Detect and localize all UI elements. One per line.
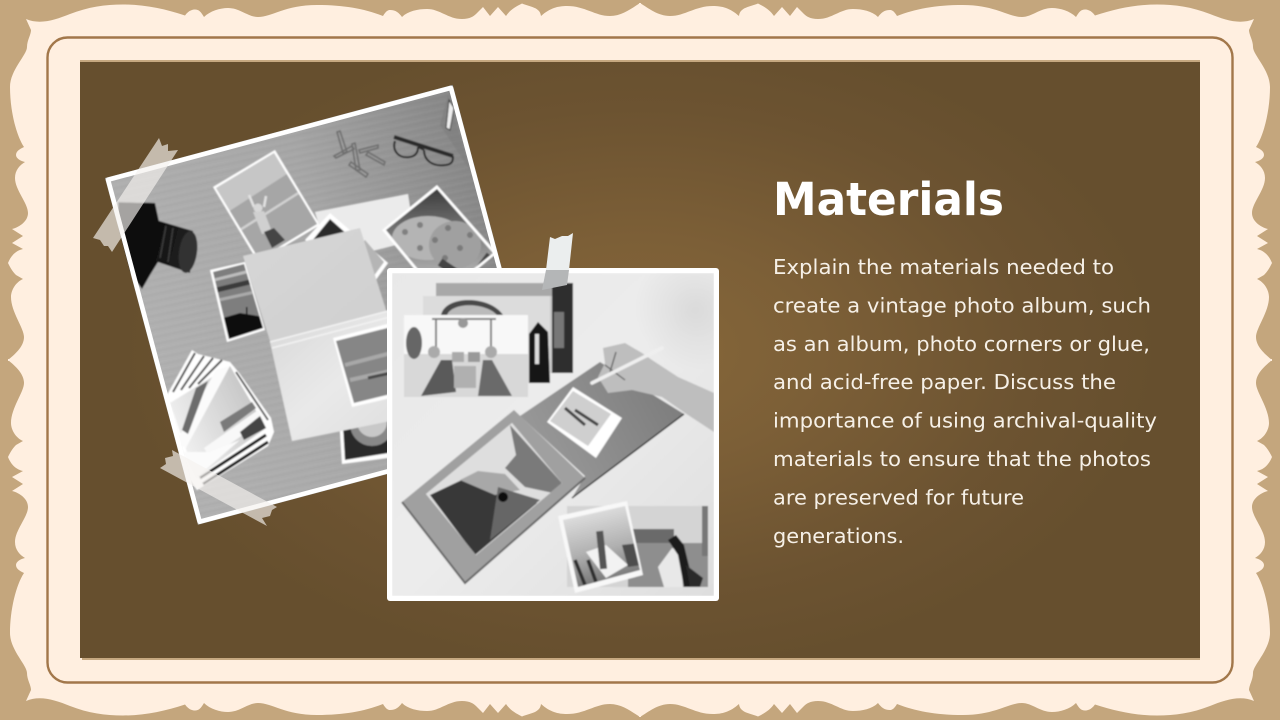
icon: glasses [394, 137, 453, 165]
print: middle wedding photo [423, 296, 550, 383]
print: square town photo [567, 506, 708, 587]
body text: materials to ensure that the photos [773, 447, 1151, 471]
photo border [387, 268, 719, 601]
icon: camera [118, 202, 200, 289]
icon: paper clips [334, 131, 385, 177]
body text: as an album, photo corners or glue, [773, 332, 1150, 356]
tape: top of album photo [542, 233, 573, 290]
print: back wedding photo [436, 283, 573, 373]
photo card: tree [382, 184, 494, 268]
photo card: dark bottom print [339, 422, 387, 465]
photo: tilted desk scene [105, 84, 502, 525]
photo card: fanned stack [167, 350, 274, 490]
tape: bottom-left corner [160, 450, 277, 526]
body text: are preserved for future [773, 485, 1024, 509]
body text: create a vintage photo album, such [773, 293, 1151, 317]
album: mountain print [426, 422, 562, 556]
hand with pen [592, 343, 714, 432]
album: small beach print [547, 387, 622, 458]
album: left page [402, 410, 585, 583]
photo card: dark triangle [304, 214, 388, 280]
body text [773, 255, 1157, 548]
photo card: white paper [314, 193, 411, 252]
body text: generations. [773, 524, 904, 548]
album: right page [520, 362, 684, 498]
photo contents [392, 273, 714, 596]
print: tilted polaroid [558, 501, 644, 593]
body text: and acid-free paper. Discuss the [773, 370, 1116, 394]
glassine sleeve [242, 228, 387, 442]
photo contents: wooden desk with objects [105, 84, 502, 525]
title: Materials [773, 173, 1004, 226]
tape: top-left corner [93, 138, 178, 252]
photo: album flat-lay [387, 268, 719, 601]
photo card: child on beach [212, 150, 320, 254]
print: front wedding photo [404, 315, 528, 397]
body text: Explain the materials needed to [773, 255, 1114, 279]
photo border [108, 88, 543, 522]
body text: importance of using archival-quality [773, 409, 1157, 433]
photo card: sunset [209, 262, 266, 342]
panel: brown content area [80, 60, 1200, 660]
